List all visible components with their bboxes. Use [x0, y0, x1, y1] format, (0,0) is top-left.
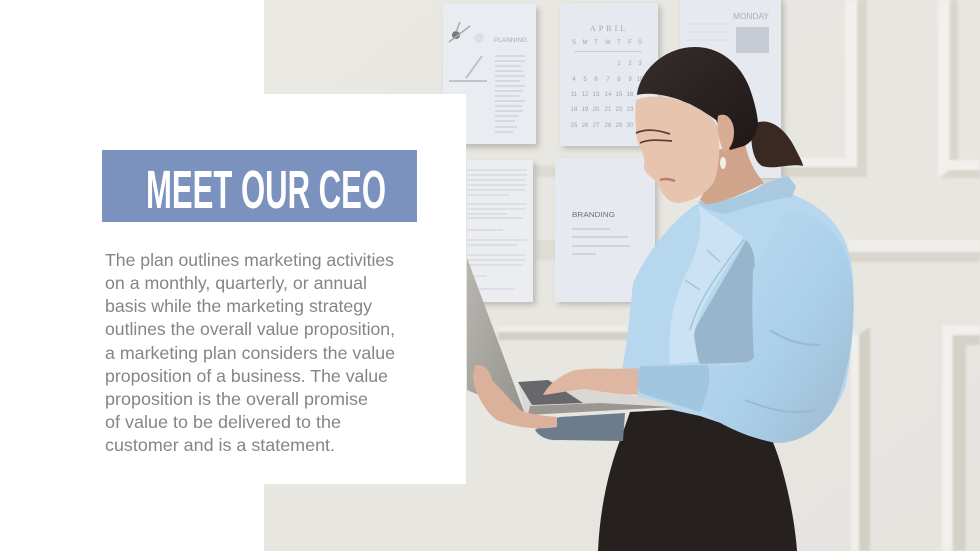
paper: april calendar: 28: [605, 123, 612, 129]
paper: april calendar: 29: [616, 123, 623, 129]
paper: april calendar: 23: [627, 107, 634, 113]
body paragraph: proposition of a business. The value: [105, 366, 388, 386]
trousers: [598, 408, 797, 551]
paper: planning: PLANNING: [494, 37, 527, 44]
paper: april calendar: 14: [605, 92, 612, 98]
body paragraph: a marketing plan considers the value: [105, 343, 395, 363]
paper: april calendar: 22: [616, 107, 623, 113]
body paragraph: basis while the marketing strategy: [105, 296, 372, 316]
paper: april calendar: 1: [617, 61, 621, 67]
far sleeve: [535, 413, 625, 441]
body paragraph: outlines the overall value proposition,: [105, 319, 395, 339]
white text card: [264, 94, 466, 484]
paper: april calendar: 11: [571, 92, 578, 98]
paper: april calendar: 27: [593, 123, 600, 129]
body paragraph: on a monthly, quarterly, or annual: [105, 273, 367, 293]
collar: [697, 176, 796, 214]
body paragraph: customer and is a statement.: [105, 435, 335, 455]
paper: april calendar: 15: [616, 92, 623, 98]
paper: april calendar: 13: [593, 92, 600, 98]
paper: april calendar: SMTWTFS: [572, 40, 642, 46]
laptop: [467, 258, 677, 415]
paper: april calendar: 7: [606, 77, 610, 83]
photo: CEO working on a laptop in front of a wall of papers: [264, 0, 980, 551]
hands: [473, 365, 638, 428]
eye and brow: [636, 130, 672, 143]
paper: april calendar: 6: [594, 77, 598, 83]
hair: [637, 47, 758, 150]
paper: april calendar: 26: [582, 123, 589, 129]
paper: april calendar: 8: [617, 77, 621, 83]
neck: [700, 143, 764, 204]
paper: april calendar: 16: [627, 92, 634, 98]
paper: april calendar: 12: [582, 92, 589, 98]
paper: planning: [443, 4, 539, 148]
sleeve fold: [745, 330, 820, 412]
ruffle: [670, 205, 745, 364]
wall mouldings: [498, 0, 980, 551]
paper: lower left document: [467, 160, 536, 305]
title banner: MEET OUR CEO: [146, 160, 386, 220]
blouse body: [620, 177, 854, 443]
wall background: [264, 0, 980, 551]
body paragraph: of value to be delivered to the: [105, 412, 341, 432]
paper: monday: [680, 0, 784, 180]
paper: april calendar: 9: [628, 77, 632, 83]
paper: monday: MONDAY: [733, 12, 770, 21]
paper: april calendar: 18: [571, 107, 578, 113]
ponytail: [751, 122, 803, 167]
paper: april calendar: 19: [582, 107, 589, 113]
mouth: [660, 179, 675, 181]
paper: april calendar: [560, 3, 661, 149]
body paragraph: [105, 250, 395, 455]
cuff: [637, 365, 709, 412]
paper: april calendar: 10: [637, 77, 644, 83]
paper: april calendar: APRIL: [590, 24, 628, 33]
body paragraph: proposition is the overall promise: [105, 389, 368, 409]
paper: april calendar: 25: [571, 123, 578, 129]
face: [635, 97, 719, 203]
blouse torso shadow: [692, 240, 755, 364]
woman: [535, 47, 854, 551]
body paragraph: The plan outlines marketing activities: [105, 250, 394, 270]
puffed sleeve: [700, 213, 854, 443]
ear and earring: [717, 115, 734, 152]
title banner: [102, 150, 417, 222]
paper: branding: BRANDING: [572, 210, 615, 219]
paper: april calendar: 21: [605, 107, 612, 113]
paper: april calendar: 2: [628, 61, 632, 67]
paper: april calendar: 3: [638, 61, 642, 67]
paper: april calendar: 20: [593, 107, 600, 113]
paper: april calendar: 4: [572, 77, 576, 83]
paper: branding: [555, 158, 658, 305]
paper: april calendar: 5: [583, 77, 587, 83]
white side panel: [0, 0, 264, 551]
paper: april calendar: 30: [627, 123, 634, 129]
